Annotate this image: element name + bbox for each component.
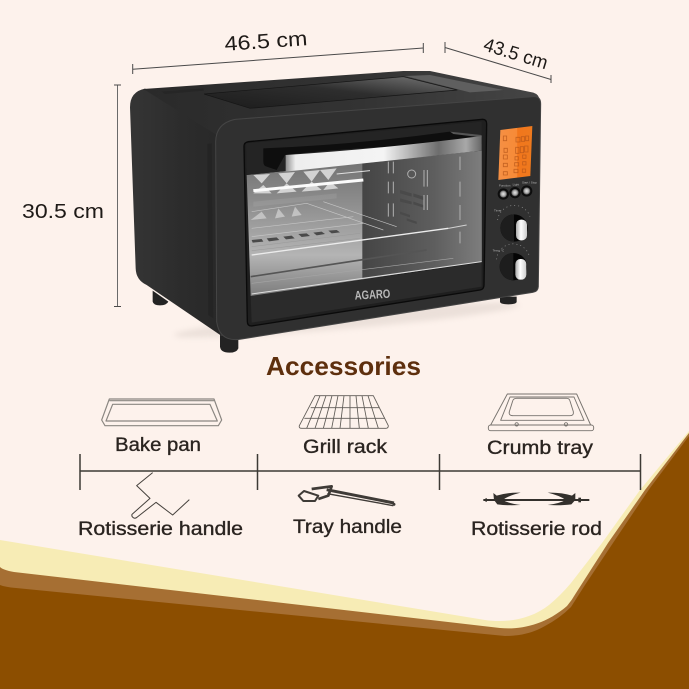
icon: rotisserie rod: [483, 493, 589, 505]
push buttons: [498, 185, 532, 200]
label: rotisserie handle: Rotisserie handle: [78, 518, 243, 540]
LCD display: [498, 126, 532, 180]
timeline divider: [80, 454, 641, 490]
label: bake pan: Bake pan: [115, 434, 201, 456]
decorative corner swoosh: [0, 431, 689, 689]
accessory: crumb tray: [487, 394, 594, 459]
icon: bake pan: [102, 399, 222, 426]
label: grill rack: Grill rack: [303, 436, 387, 458]
door handle: [246, 122, 482, 175]
oven feet: [153, 291, 517, 353]
icon: grill rack: [299, 396, 388, 428]
accessory: bake pan: [102, 399, 222, 456]
heading: Accessories: Accessories: [266, 351, 421, 381]
label: tray handle: Tray handle: [293, 516, 402, 538]
accessory: rotisserie handle: [78, 473, 243, 540]
oven illustration: [130, 71, 541, 353]
accessory: grill rack: [299, 396, 388, 458]
control labels: Function: [499, 184, 511, 188]
dimension: height 30.5 cm: [22, 85, 121, 306]
oven front: [216, 97, 541, 340]
temperature knob: [497, 244, 529, 280]
dimension: depth 43.5 cm: [445, 35, 551, 83]
dimension: width 46.5 cm: [133, 27, 423, 74]
oven side: [130, 89, 233, 336]
top panels: [204, 77, 457, 108]
control labels: Temp °C: [493, 249, 505, 253]
dimension: depth 43.5 cm: 43.5 cm: [481, 35, 550, 74]
rack dark slots: [252, 190, 423, 243]
wire racks: [251, 202, 482, 294]
rack side supports: [388, 157, 460, 243]
back wall pattern: [251, 168, 338, 220]
dimension: width 46.5 cm: 46.5 cm: [224, 27, 308, 56]
control labels: Light: [513, 182, 519, 186]
control labels: Start / Stop: [522, 181, 537, 185]
icon: crumb tray: [488, 394, 594, 431]
control labels: [493, 181, 537, 253]
timer knob: [498, 205, 530, 242]
dimension: height 30.5 cm: 30.5 cm: [22, 201, 104, 223]
door lower panel: [251, 263, 482, 323]
icon: tray handle: [299, 486, 395, 506]
door glass: [247, 151, 482, 296]
floor shadow: [173, 296, 520, 344]
control labels: Timer: [494, 209, 502, 213]
accessory: rotisserie rod: [471, 493, 602, 540]
oven door: [244, 119, 487, 326]
label: crumb tray: Crumb tray: [487, 437, 593, 459]
AGARO logo: AGARO: [354, 287, 391, 303]
accessory: tray handle: [293, 486, 402, 538]
label: rotisserie rod: Rotisserie rod: [471, 518, 602, 540]
side vent strip: [207, 143, 213, 318]
rotisserie rod: [253, 180, 363, 191]
icon: rotisserie handle: [132, 473, 189, 518]
oven top: [143, 71, 539, 135]
